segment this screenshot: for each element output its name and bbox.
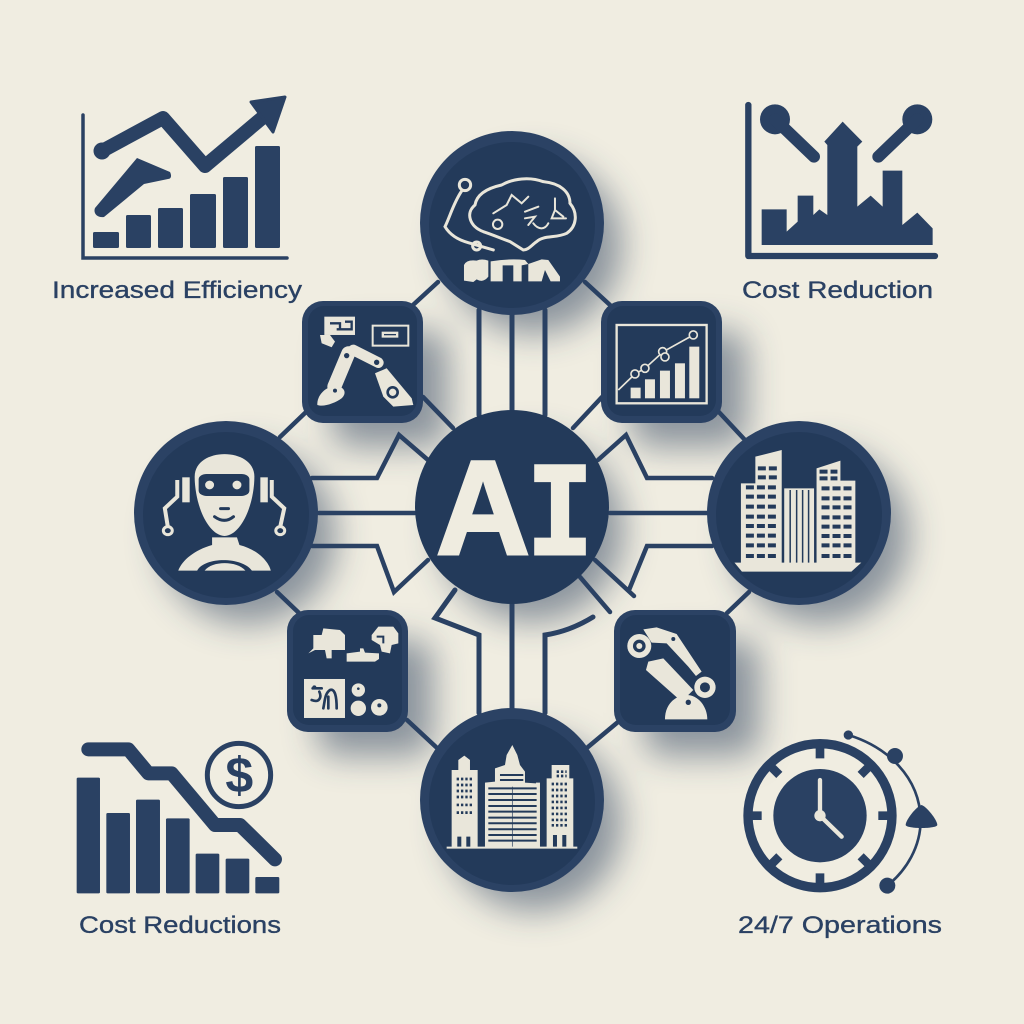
node: robot arm square bottom-right [614,610,736,732]
node shadows [160,158,909,911]
node: buildings circle right [707,421,891,605]
icon: industrial robot arm [627,627,716,719]
label: 24/7 Operations [738,912,942,939]
node: robot arm square top-left [302,301,423,423]
icon: brain [445,179,575,282]
icon: robot arm with panels [317,317,413,407]
panel: increased efficiency [52,97,302,304]
icon: robot head [163,454,285,571]
label: Cost Reductions [79,912,281,939]
panel: cost reduction [742,104,935,304]
icon: falling bars with dollar coin [77,743,279,893]
icon: city skyline [447,745,577,849]
icon: clock with orbit [748,730,937,894]
node: chart square top-right [601,301,722,423]
AI text: A [436,434,530,583]
label: Cost Reduction [742,277,933,304]
node: brain circle top [420,131,604,315]
node: machines square bottom-left [287,610,408,732]
panel: 24/7 operations [738,730,942,939]
node: skyline circle bottom [420,708,604,892]
connector lines [277,282,749,747]
icon: rising bar chart with arrow [83,97,287,258]
center AI circle [415,410,609,604]
label: Increased Efficiency [52,277,302,304]
icon: brain base blocks [464,259,560,282]
icon: framed growth chart [617,325,707,403]
panel: cost reductions [77,743,281,939]
node: robot face circle left [134,421,318,605]
AI text: I [527,443,593,595]
icon: falling bars with dollar coin: $ [225,747,253,803]
icon: office buildings [734,450,861,572]
icon: machines and symbols [304,627,398,718]
icon: skyline chart with lollipops [748,104,935,256]
